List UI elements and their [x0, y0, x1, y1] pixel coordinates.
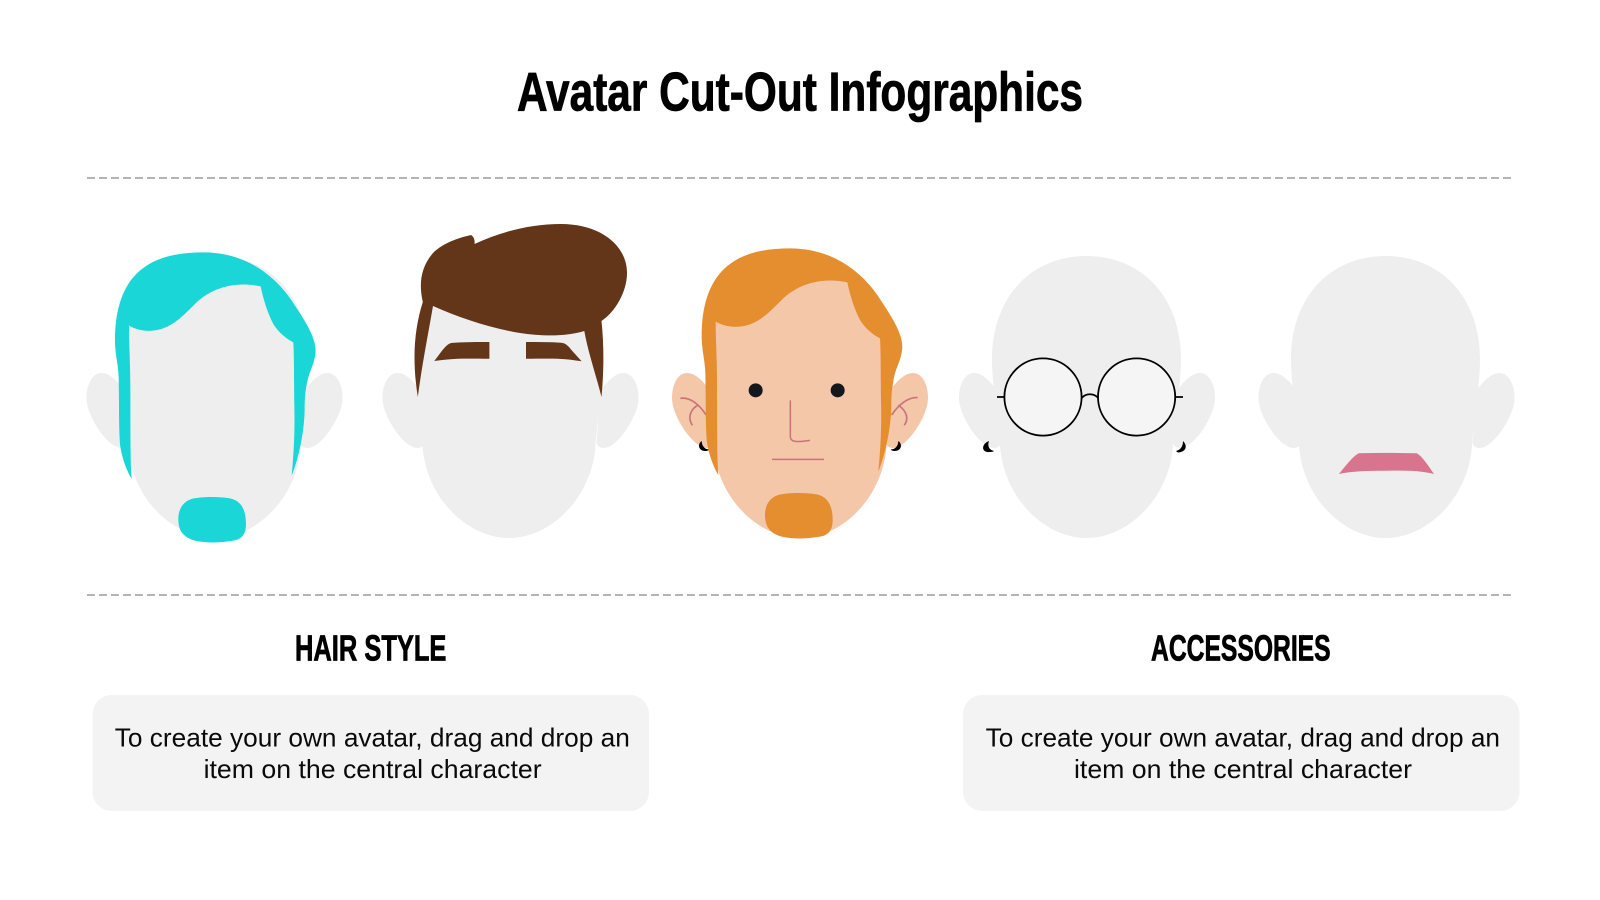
avatar: glasses and earrings option — [959, 256, 1215, 538]
skin head and ears — [672, 256, 928, 538]
avatar: moustache option — [1258, 256, 1514, 538]
brown quiff hair — [415, 224, 627, 397]
face details and hair — [680, 248, 918, 539]
eyes — [749, 383, 845, 397]
heading: hair style: HAIR STYLE — [295, 628, 446, 669]
central character — [672, 248, 928, 539]
brown eyebrows — [434, 342, 582, 361]
panel: hair style description — [92, 695, 649, 811]
hair style text — [115, 723, 630, 784]
blank head — [86, 256, 342, 538]
avatar: cyan hair and beard option — [86, 252, 342, 543]
nose and mouth — [772, 400, 824, 459]
pink moustache — [1339, 453, 1434, 474]
accessories text: item on the central character — [1074, 754, 1412, 784]
avatar: brown hair and eyebrows option — [382, 224, 638, 538]
panel: accessories description — [963, 695, 1520, 811]
accessories text: To create your own avatar, drag and drop an — [986, 723, 1500, 753]
hair style text: item on the central character — [204, 754, 542, 784]
round glasses — [997, 358, 1183, 436]
title: Avatar Cut-Out Infographics — [517, 61, 1083, 123]
orange hair and goatee — [702, 248, 902, 539]
blank head — [1258, 256, 1514, 538]
cyan hair and goatee — [115, 252, 316, 543]
hair style text: To create your own avatar, drag and drop an — [115, 723, 630, 753]
blank head — [382, 256, 638, 538]
ear lines — [680, 398, 918, 425]
earrings — [983, 441, 1186, 452]
earrings — [699, 441, 901, 451]
blank head — [959, 256, 1215, 538]
heading: accessories: ACCESSORIES — [1151, 628, 1331, 669]
accessories text — [986, 723, 1500, 784]
